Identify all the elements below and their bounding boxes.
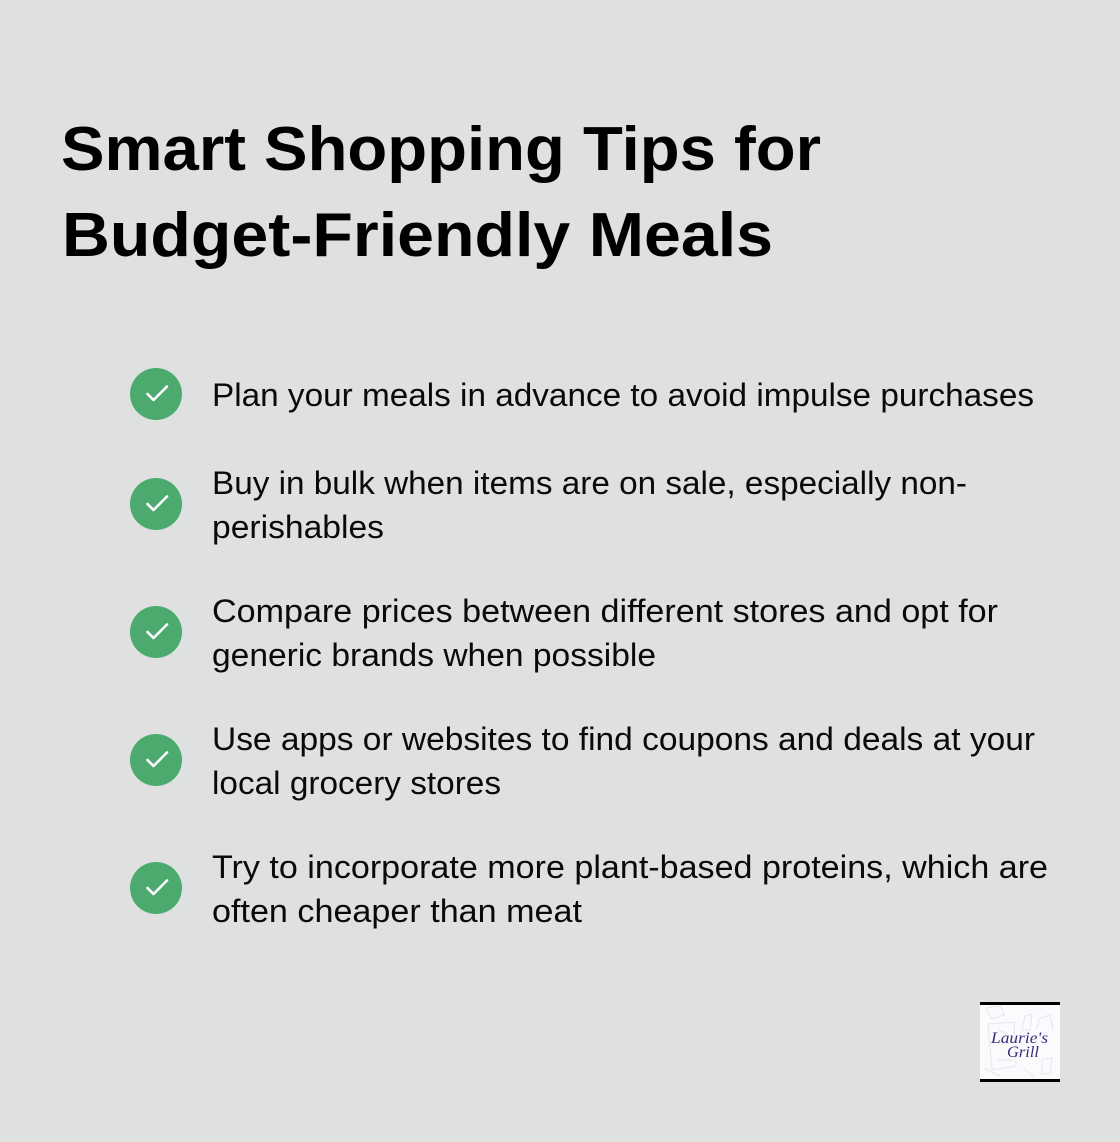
tip 4 text: local grocery stores	[212, 765, 501, 801]
title: Budget-Friendly Meals	[62, 201, 773, 270]
title	[61, 115, 821, 270]
tip 2 text: Buy in bulk when items are on sale, especially non-	[212, 465, 967, 501]
tip 4	[130, 721, 1035, 801]
tip 4 text	[212, 721, 1035, 801]
tip 3	[130, 593, 998, 673]
tip 5	[130, 849, 1048, 929]
tip 5 text: Try to incorporate more plant-based proteins, which are	[212, 849, 1048, 885]
icon: green check	[130, 478, 182, 530]
tip 3 text: generic brands when possible	[212, 637, 656, 673]
tip 3 text	[212, 593, 998, 673]
icon: green check	[130, 862, 182, 914]
icon: green check	[130, 368, 182, 420]
logo: Laurie's Grill: Laurie's	[990, 1030, 1048, 1047]
title: Smart Shopping Tips for	[61, 115, 821, 184]
tip 1	[130, 368, 1034, 420]
tip 2 text	[212, 465, 967, 545]
logo: Laurie's Grill: Grill	[1007, 1044, 1040, 1061]
tip 5 text: often cheaper than meat	[212, 893, 582, 929]
tip 5 text	[212, 849, 1048, 929]
tip 3 text: Compare prices between different stores and opt for	[212, 593, 998, 629]
tip 1 text: Plan your meals in advance to avoid impulse purchases	[212, 377, 1034, 413]
tip 4 text: Use apps or websites to find coupons and deals at your	[212, 721, 1035, 757]
tip 2	[130, 465, 967, 545]
tip 2 text: perishables	[212, 509, 384, 545]
icon: green check	[130, 606, 182, 658]
logo: Laurie's Grill	[980, 1002, 1060, 1082]
icon: green check	[130, 734, 182, 786]
